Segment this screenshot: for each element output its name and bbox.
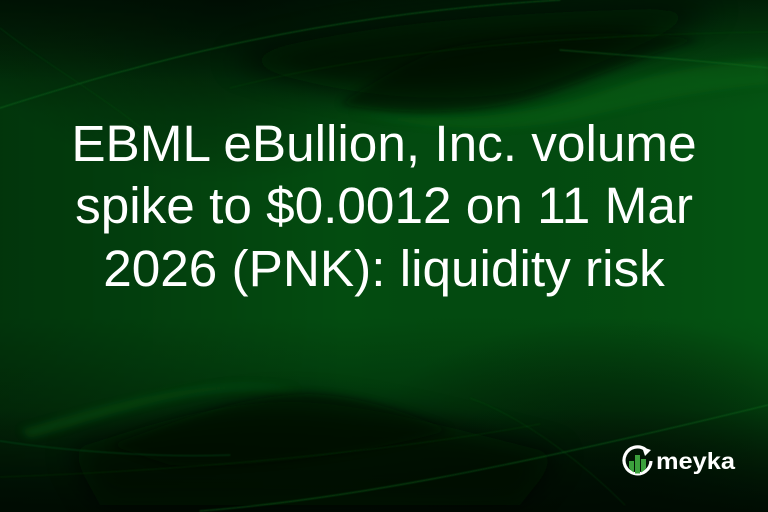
title: EBML eBullion, Inc. volume (71, 115, 697, 172)
title: 2026 (PNK): liquidity risk (103, 240, 665, 297)
bottom dark sweep (70, 394, 560, 505)
title: spike to $0.0012 on 11 Mar (75, 177, 693, 234)
icon: ring with bars (624, 447, 651, 474)
wordmark: meyka (656, 448, 735, 474)
bright wave bands (350, 60, 768, 128)
top dark sweep (230, 8, 720, 112)
title (71, 115, 697, 297)
logo: meyka (622, 445, 736, 476)
